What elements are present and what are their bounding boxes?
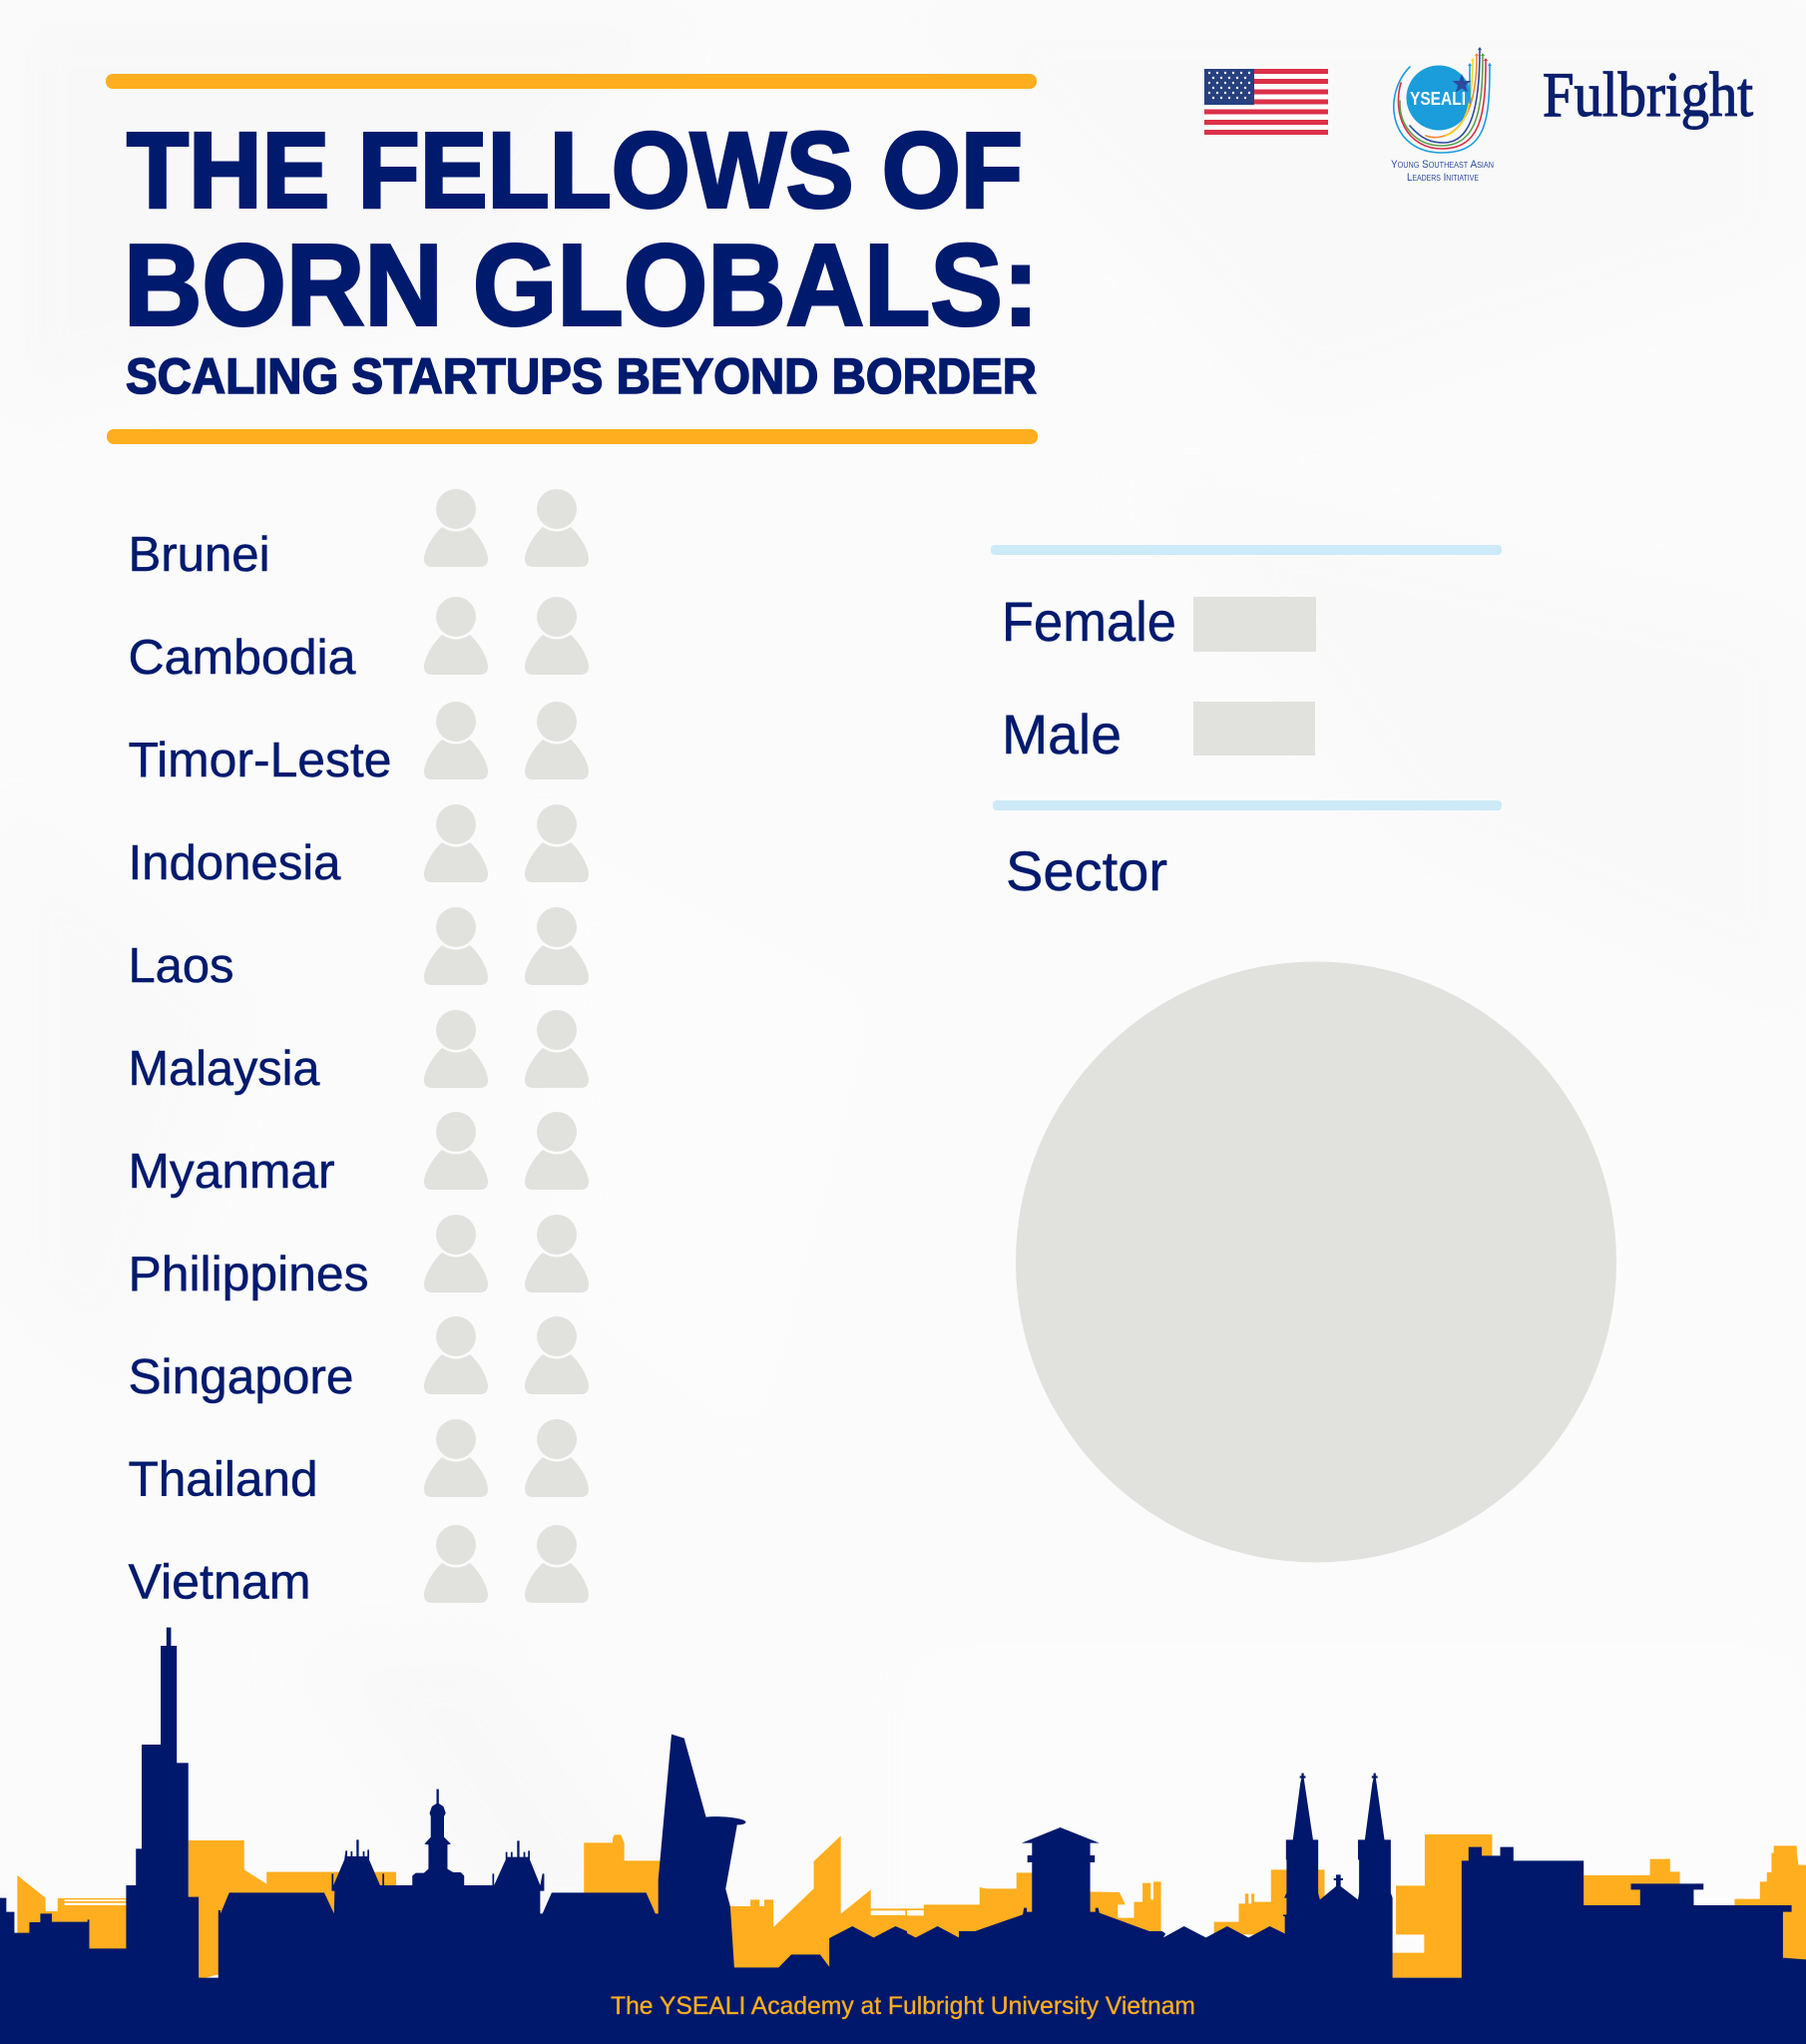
logo: YSEALI: Young Southeast Asian: [1391, 159, 1494, 171]
country row: Cambodia: Cambodia: [128, 631, 356, 685]
country row: Singapore: Singapore: [128, 1350, 353, 1404]
skyline: [0, 1628, 1806, 2044]
subtitle: SCALING STARTUPS BEYOND BORDER: [126, 348, 1037, 404]
top accent bar: [106, 74, 1037, 89]
country row: Brunei: [128, 489, 589, 582]
country row: Myanmar: Myanmar: [128, 1145, 335, 1199]
navy silhouette, right half: [900, 1774, 1806, 2044]
country row: Vietnam: Vietnam: [128, 1555, 311, 1609]
logo: YSEALI: Leaders Initiative: [1407, 172, 1479, 184]
logo: US flag: [1204, 69, 1328, 135]
logo: YSEALI: [1391, 47, 1494, 184]
country row: Thailand: [128, 1419, 589, 1507]
country row: Laos: Laos: [128, 939, 233, 993]
country row: Indonesia: [128, 804, 589, 890]
title: BORN GLOBALS:: [124, 220, 1039, 349]
logo: YSEALI: YSEALI: [1410, 89, 1466, 109]
title: THE FELLOWS OF: [127, 110, 1023, 230]
sector pie placeholder: [1016, 962, 1616, 1563]
country row: Cambodia: [128, 597, 589, 685]
sector heading: Sector: [1006, 839, 1167, 902]
country row: Myanmar: [128, 1112, 589, 1199]
country row: Philippines: Philippines: [128, 1248, 369, 1301]
country row: Indonesia: Indonesia: [128, 836, 341, 890]
legend: gender: [991, 545, 1502, 810]
country row: Timor-Leste: Timor-Leste: [128, 734, 391, 787]
country row: Thailand: Thailand: [128, 1453, 317, 1507]
title: [124, 110, 1039, 349]
country row: Timor-Leste: [128, 702, 589, 787]
footer credit: The YSEALI Academy at Fulbright University Vietnam: [611, 1992, 1195, 2020]
navy silhouette, left half: [0, 1628, 907, 2044]
country row: Malaysia: Malaysia: [128, 1042, 320, 1096]
country row: Laos: [128, 907, 589, 993]
orange background buildings, left half: [17, 1834, 907, 1979]
legend: gender: Female: [1002, 590, 1176, 653]
country row: Singapore: [128, 1316, 589, 1404]
bottom accent bar: [107, 429, 1038, 444]
country row: Brunei: Brunei: [128, 528, 269, 582]
legend: gender: Male: [1002, 703, 1122, 766]
country row: Vietnam: [128, 1525, 589, 1609]
orange background buildings, right half: [900, 1834, 1806, 1978]
country row: Malaysia: [128, 1010, 589, 1096]
logo: Fulbright: Fulbright: [1543, 60, 1753, 130]
country row: Philippines: [128, 1215, 589, 1301]
